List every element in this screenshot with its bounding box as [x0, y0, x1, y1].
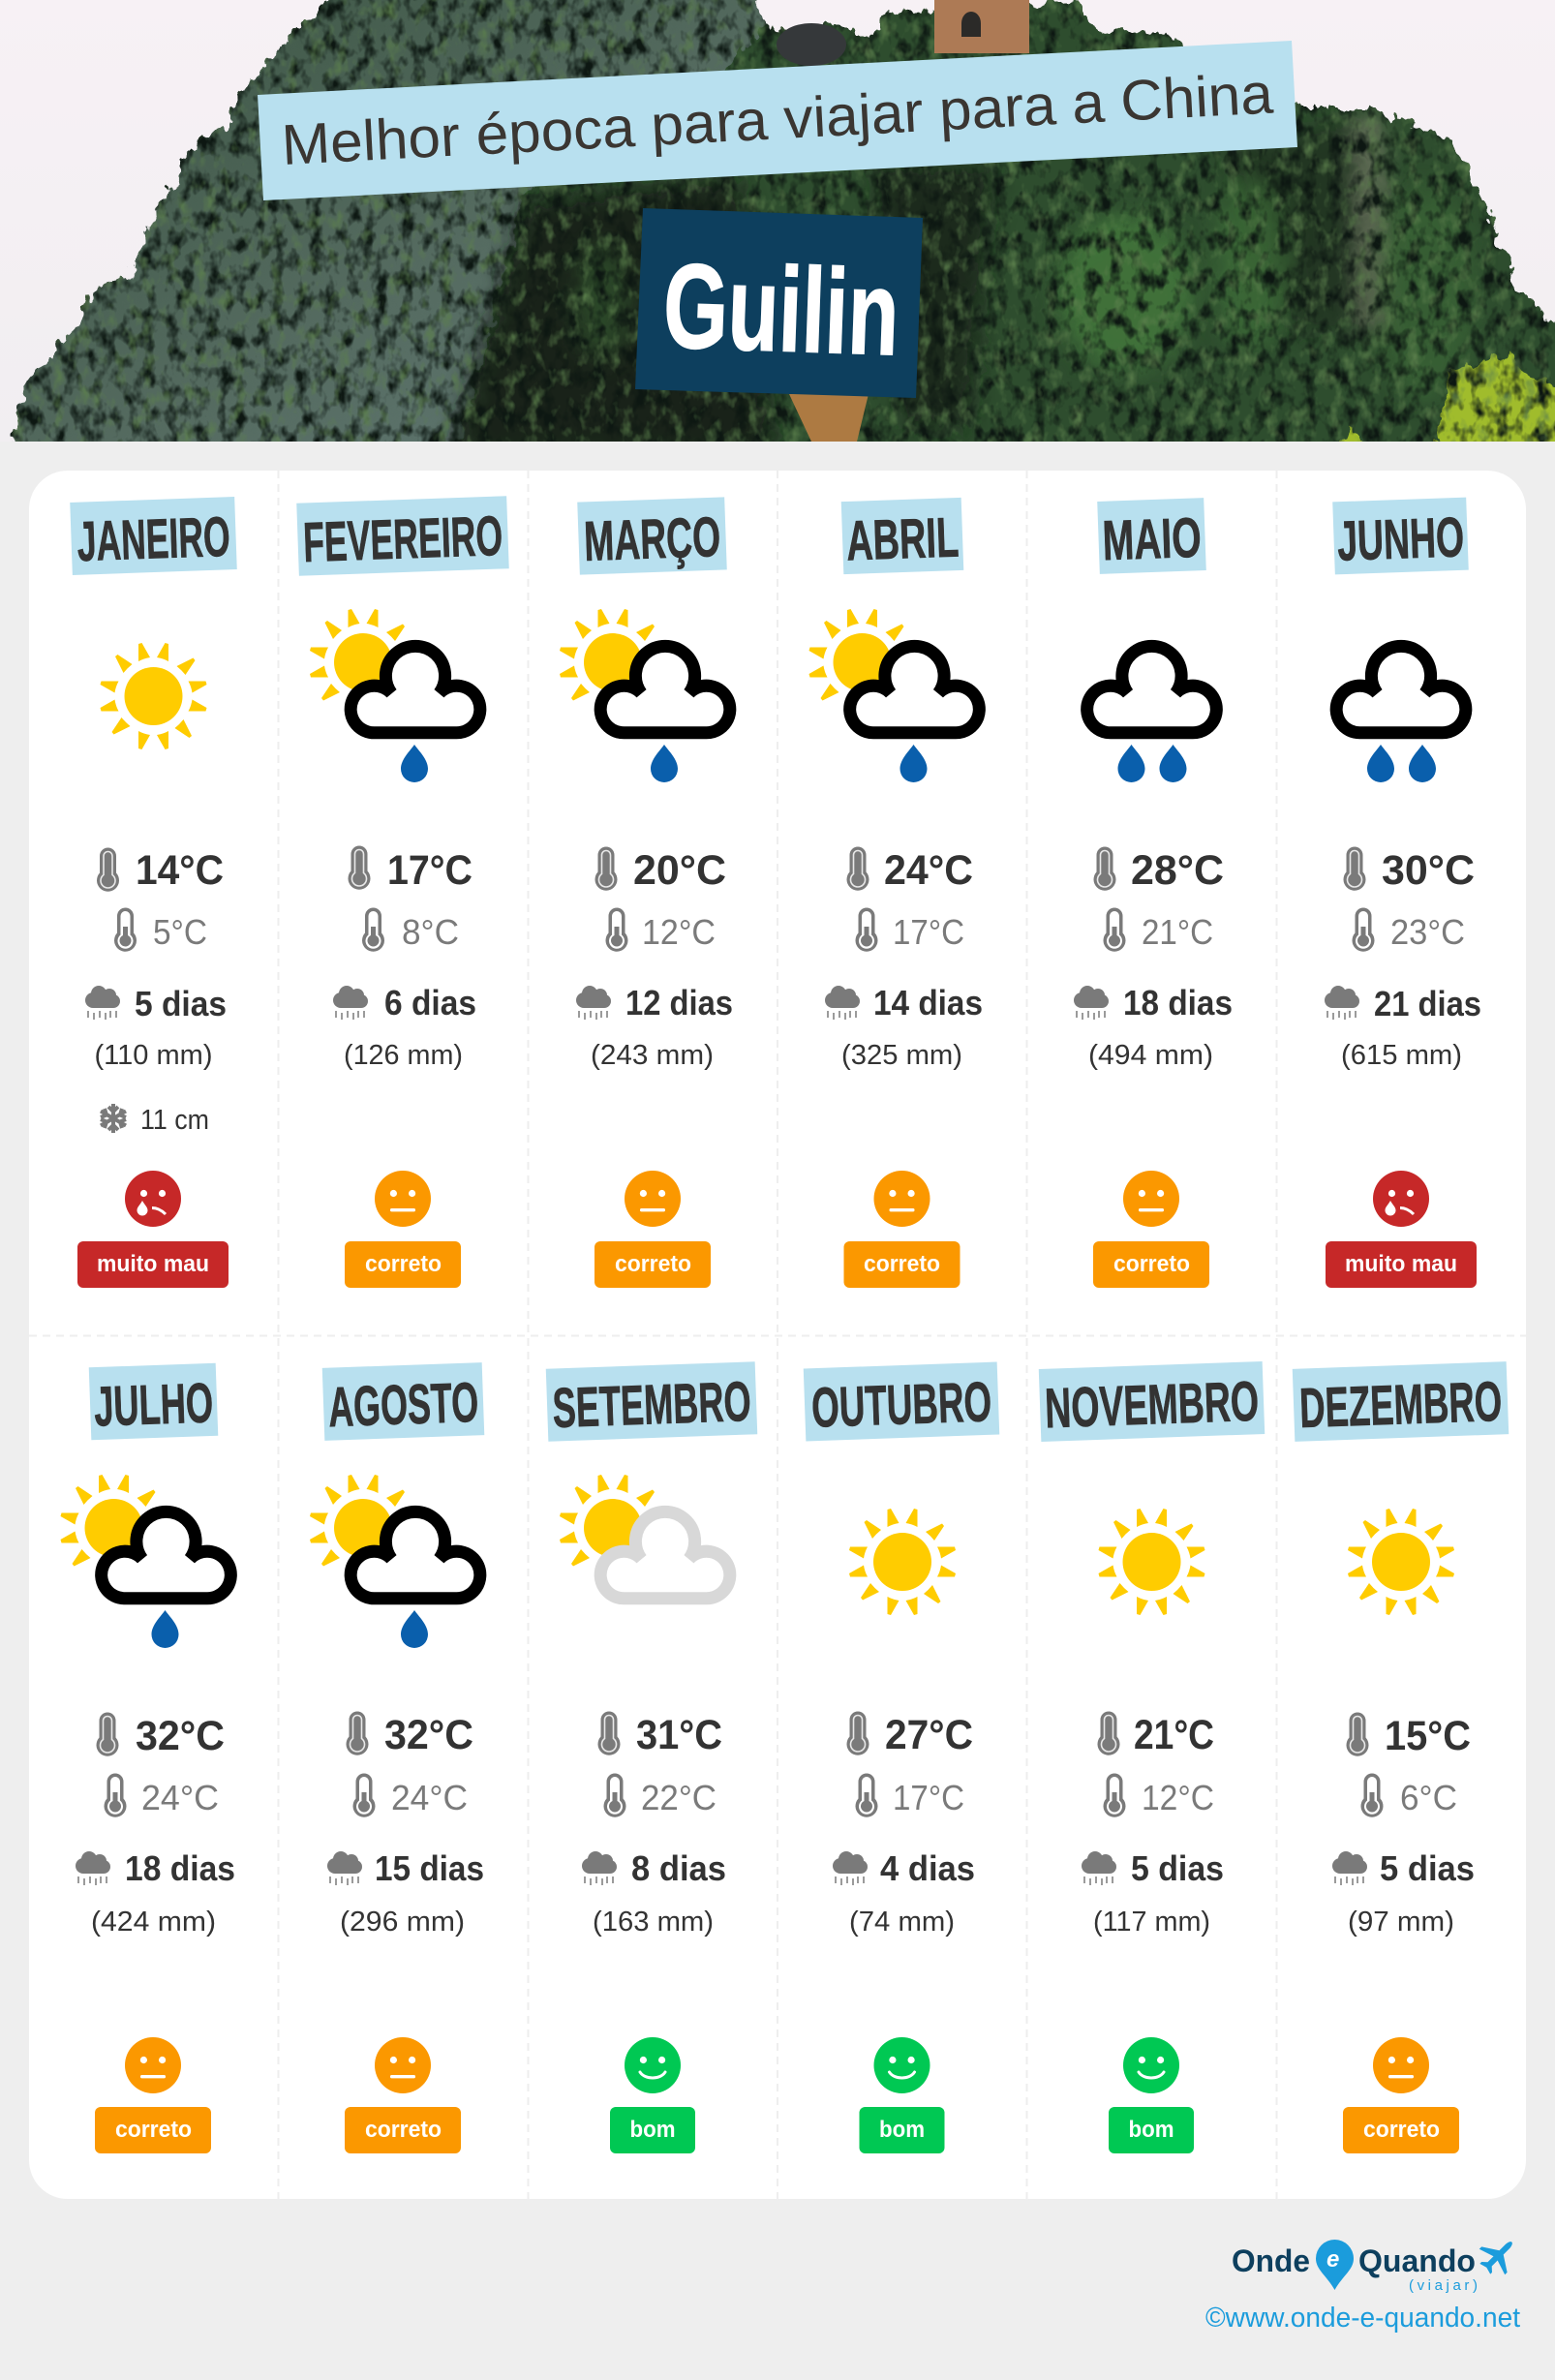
rating: correto: [95, 2037, 211, 2153]
rain days: 6 dias: [384, 983, 476, 1022]
icon: sun, cloud, drop: [560, 609, 730, 782]
min temperature: 24°C: [391, 1778, 468, 1817]
month: fevereiro: [296, 496, 509, 1288]
rain days: [582, 1848, 726, 1888]
rainfall: (424 mm): [91, 1907, 216, 1938]
rain days: 5 dias: [1380, 1848, 1475, 1888]
month heading: SETEMBRO: [552, 1370, 752, 1440]
month heading: [546, 1361, 757, 1442]
max temperature: 21°C: [1134, 1712, 1214, 1758]
rain days: 12 dias: [625, 983, 733, 1022]
month: agosto: [310, 1362, 484, 2153]
max temperature: 17°C: [387, 847, 473, 894]
rainfall: (163 mm): [593, 1907, 714, 1938]
snowfall: [101, 1104, 209, 1136]
max temperature: 27°C: [885, 1712, 973, 1758]
rating: bom: bom: [879, 2117, 925, 2143]
min temperature: [856, 1774, 964, 1817]
city label: Guilin: Guilin: [661, 239, 901, 381]
max temperature: 31°C: [636, 1712, 722, 1758]
max temperature: [846, 846, 973, 894]
month: maio: [1074, 498, 1233, 1288]
rain days: 15 dias: [375, 1848, 484, 1888]
rating: muito mau: muito mau: [97, 1251, 209, 1277]
rain days: 5 dias: [135, 984, 227, 1023]
month: dezembro: [1293, 1361, 1509, 2153]
month heading: MAIO: [1102, 506, 1203, 572]
max temperature: [598, 1712, 722, 1758]
min temperature: [114, 908, 207, 952]
icon: sun: [101, 643, 207, 749]
title banner: Melhor época para viajar para a China: [280, 61, 1274, 177]
month heading: AGOSTO: [327, 1371, 479, 1439]
rain days: 18 dias: [125, 1848, 235, 1888]
min temperature: [604, 1774, 717, 1817]
max temperature: 24°C: [884, 847, 973, 894]
icon: location pin: [1316, 2240, 1354, 2290]
rating: muito mau: muito mau: [1345, 1251, 1457, 1277]
rating: bom: bom: [1129, 2117, 1174, 2143]
rain days: [327, 1848, 484, 1888]
month heading: [1039, 1361, 1265, 1442]
rain days: [76, 1848, 235, 1888]
rating: correto: correto: [1113, 1251, 1190, 1277]
rain days: 5 dias: [1131, 1848, 1224, 1888]
min temperature: 8°C: [402, 912, 459, 952]
min temperature: 24°C: [141, 1778, 219, 1817]
month heading: OUTUBRO: [810, 1370, 992, 1440]
rainfall: (110 mm): [95, 1040, 213, 1071]
min temperature: 6°C: [1400, 1778, 1457, 1817]
min temperature: [1104, 908, 1213, 952]
rainfall: (325 mm): [841, 1040, 962, 1071]
rating: correto: correto: [864, 1251, 940, 1277]
boulder: [777, 23, 846, 66]
rainfall: (296 mm): [340, 1907, 465, 1938]
rating: correto: [1343, 2037, 1459, 2153]
rating: correto: [345, 2037, 461, 2153]
panel: monthly calendar card: [29, 471, 1526, 2199]
icon: sun, cloud, drop: [809, 609, 979, 782]
month heading: [70, 497, 237, 575]
month heading: [1097, 498, 1206, 574]
month heading: [841, 498, 963, 574]
max temperature: [97, 1712, 225, 1759]
max temperature: [846, 1712, 973, 1758]
max temperature: [97, 847, 224, 894]
month heading: JANEIRO: [76, 505, 231, 573]
rating: correto: correto: [1363, 2117, 1440, 2143]
min temperature: [352, 1774, 468, 1817]
orange rock face: [789, 394, 869, 442]
icon: sun: [1348, 1509, 1454, 1615]
max temperature: 14°C: [136, 847, 224, 894]
rain days: 8 dias: [631, 1848, 726, 1888]
month: janeiro: [70, 497, 237, 1288]
rain days: [85, 984, 227, 1023]
rainfall: (117 mm): [1093, 1907, 1210, 1938]
yellow green bush: [1338, 351, 1555, 442]
temple on the summit: [934, 0, 1029, 53]
min temperature: [1352, 908, 1465, 952]
rain days: [1074, 983, 1233, 1022]
rain days: [1325, 984, 1481, 1023]
rainfall: (615 mm): [1341, 1040, 1462, 1071]
rating: bom: [1109, 2037, 1194, 2153]
rainfall: (126 mm): [344, 1040, 463, 1071]
rating: correto: [595, 1171, 711, 1288]
month: setembro: [546, 1361, 757, 2153]
month heading: [577, 497, 727, 575]
logo: Onde e Quando: Quando: [1358, 2243, 1476, 2278]
rating: correto: [345, 1171, 461, 1288]
min temperature: 23°C: [1390, 912, 1465, 952]
rain days: 21 dias: [1374, 984, 1481, 1023]
icon: sun, cloud, drop: [310, 1475, 480, 1648]
month heading: JULHO: [93, 1371, 214, 1439]
rain days: [825, 983, 983, 1022]
rainfall: (97 mm): [1348, 1907, 1454, 1938]
rating: bom: [860, 2037, 945, 2153]
month: junho: [1325, 498, 1481, 1288]
rainfall: (243 mm): [591, 1040, 714, 1071]
min temperature: 17°C: [893, 912, 964, 952]
icon: cloud, two drops: [1336, 646, 1466, 782]
min temperature: [362, 908, 459, 952]
min temperature: [105, 1774, 219, 1817]
icon: sun, cloud, drop: [310, 609, 480, 782]
month heading: JUNHO: [1336, 505, 1465, 573]
month heading: ABRIL: [845, 505, 960, 573]
city label: Guilin: [635, 208, 923, 398]
logo: Onde e Quando: Onde: [1232, 2243, 1310, 2278]
month heading: FEVEREIRO: [302, 504, 503, 574]
month heading: [1332, 498, 1469, 574]
rating: bom: [610, 2037, 695, 2153]
rain days: [333, 983, 476, 1022]
month heading: [804, 1362, 999, 1441]
min temperature: 12°C: [642, 912, 716, 952]
rain days: [833, 1848, 975, 1888]
min temperature: [606, 908, 716, 952]
min temperature: 22°C: [641, 1778, 717, 1817]
snowfall: 11 cm: [140, 1105, 209, 1136]
month heading: [89, 1363, 218, 1440]
rain days: [1082, 1848, 1224, 1888]
rain days: [1332, 1848, 1475, 1888]
rating: correto: [1093, 1171, 1209, 1288]
min temperature: 17°C: [893, 1778, 964, 1817]
month heading: [322, 1362, 484, 1441]
month heading: NOVEMBRO: [1044, 1370, 1260, 1440]
rating: correto: correto: [365, 2117, 442, 2143]
icon: airplane: [1473, 2229, 1525, 2281]
icon: sun, grey cloud: [560, 1475, 730, 1599]
max temperature: 30°C: [1382, 847, 1475, 894]
max temperature: [1098, 1712, 1214, 1758]
month heading: [296, 496, 509, 576]
max temperature: 32°C: [136, 1713, 225, 1759]
max temperature: [347, 1712, 473, 1758]
min temperature: [1104, 1774, 1214, 1817]
header photo: Guilin karst mountain: [0, 0, 1555, 455]
max temperature: 15°C: [1385, 1713, 1471, 1759]
max temperature: 28°C: [1131, 847, 1224, 894]
icon: location pin: e: [1326, 2246, 1339, 2273]
max temperature: [1346, 1712, 1471, 1759]
icon: cloud, two drops: [1087, 646, 1216, 782]
rainfall: (74 mm): [849, 1907, 955, 1938]
rating: correto: [844, 1171, 960, 1288]
rating: correto: correto: [615, 1251, 691, 1277]
icon: sun: [849, 1509, 956, 1615]
rating: correto: correto: [365, 1251, 442, 1277]
min temperature: 12°C: [1142, 1778, 1214, 1817]
max temperature: 32°C: [384, 1712, 473, 1758]
month: outubro: [804, 1362, 999, 2153]
rain days: 4 dias: [880, 1848, 975, 1888]
rain days: 14 dias: [873, 983, 983, 1022]
title banner: [258, 41, 1297, 200]
rating: bom: bom: [629, 2117, 676, 2143]
logo: Onde e Quando: [1232, 2229, 1525, 2294]
min temperature: [856, 908, 964, 952]
rain days: 18 dias: [1123, 983, 1233, 1022]
rating: correto: correto: [115, 2117, 192, 2143]
month: março: [560, 497, 733, 1288]
min temperature: 5°C: [153, 912, 207, 952]
month: novembro: [1039, 1361, 1265, 2153]
month: abril: [809, 498, 983, 1288]
icon: sun: [1098, 1509, 1204, 1615]
rating: muito mau: [77, 1171, 229, 1288]
month heading: MARÇO: [583, 505, 721, 573]
rain days: [576, 983, 733, 1022]
max temperature: 20°C: [633, 847, 726, 894]
icon: sun, cloud, drop: [60, 1475, 230, 1648]
rating: muito mau: [1326, 1171, 1477, 1288]
max temperature: [349, 846, 473, 894]
website credit: ©www.onde-e-quando.net: [1205, 2303, 1520, 2334]
min temperature: 21°C: [1142, 912, 1213, 952]
month: julho: [60, 1363, 235, 2153]
rainfall: (494 mm): [1088, 1040, 1213, 1071]
min temperature: [1361, 1774, 1457, 1817]
logo: Onde e Quando: (viajar): [1409, 2277, 1478, 2294]
